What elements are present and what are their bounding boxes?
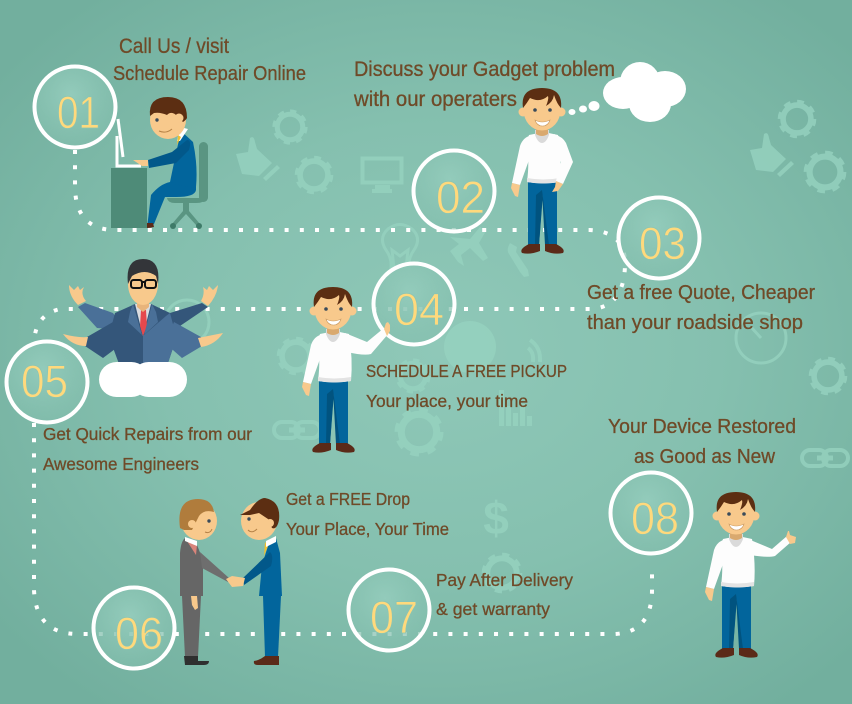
text: free drop: Get a FREE Drop — [286, 489, 410, 509]
cloud seat — [99, 362, 187, 397]
text: device restored: Your Device Restored — [608, 416, 796, 438]
step 04 — [302, 264, 567, 453]
icon: bar chart — [499, 390, 532, 426]
step 07 — [348, 570, 573, 650]
text: good as new: as Good as New — [634, 446, 776, 468]
number 06: 06 — [115, 608, 163, 659]
icon: gear — [296, 157, 332, 193]
step 02 — [353, 58, 686, 254]
icon: wrench — [508, 243, 529, 277]
icon: clock — [736, 313, 786, 363]
icon: chain — [274, 422, 320, 438]
icon: gear — [397, 360, 429, 392]
icon: gear — [278, 338, 314, 374]
man giving thumbs up — [705, 492, 796, 658]
number 03: 03 — [639, 218, 686, 269]
heading: call us: Call Us / visit — [119, 34, 229, 58]
icon: gear — [274, 111, 306, 143]
icon: signal — [528, 340, 540, 362]
number 04: 04 — [394, 284, 444, 335]
text: awesome engineers: Awesome Engineers — [43, 454, 199, 474]
computer — [117, 119, 141, 166]
icon: globe — [444, 321, 496, 373]
number circle 08 — [610, 472, 692, 554]
background icons — [165, 101, 848, 592]
text: pay after delivery: Pay After Delivery — [436, 570, 573, 590]
text: roadside shop: than your roadside shop — [587, 311, 803, 334]
heading: schedule repair online: Schedule Repair Online — [113, 63, 306, 85]
number circle 04 — [374, 264, 454, 344]
icon: light bulb — [382, 224, 418, 268]
icon: gear — [779, 101, 815, 137]
number 08: 08 — [631, 493, 679, 544]
step 08 — [608, 416, 796, 658]
number circle 02 — [414, 150, 494, 232]
text: quick repairs: Get Quick Repairs from our — [43, 424, 252, 444]
icon: gear — [397, 410, 441, 454]
number circle 03 — [618, 198, 700, 278]
text: discuss: Discuss your Gadget problem — [354, 58, 615, 81]
number circle 07 — [348, 570, 430, 650]
icon: airplane — [450, 227, 488, 266]
number 05: 05 — [21, 356, 68, 407]
number circle 01 — [34, 66, 116, 148]
number circle 06 — [94, 588, 174, 668]
icon: gear — [483, 554, 521, 592]
number 07: 07 — [370, 592, 418, 643]
icon: dollar: $ — [483, 492, 509, 544]
text: your place your time: Your Place, Your Time — [286, 519, 449, 539]
dotted path — [34, 150, 652, 634]
number circle 05 — [6, 342, 88, 422]
man pointing at circle — [302, 287, 390, 453]
text: operators: with our operaters — [353, 88, 517, 111]
chair — [167, 142, 208, 229]
icon: thumbs up — [236, 137, 280, 181]
meditating businessman — [63, 259, 223, 372]
icon: monitor — [362, 158, 402, 191]
seated man — [133, 97, 197, 228]
step 03 — [587, 198, 815, 334]
two men shaking hands — [179, 498, 282, 665]
text: your place: Your place, your time — [366, 391, 528, 411]
icon: clock behind figure — [165, 300, 209, 344]
text: schedule pickup: SCHEDULE A FREE PICKUP — [366, 361, 567, 381]
icon: gear — [805, 152, 845, 192]
step 05 — [6, 259, 252, 474]
icon: chain — [802, 450, 848, 466]
text: free quote: Get a free Quote, Cheaper — [587, 281, 815, 304]
step 06 — [94, 489, 449, 668]
number 02: 02 — [436, 172, 485, 223]
thought cloud — [568, 62, 686, 122]
number 01: 01 — [57, 87, 100, 138]
text: warranty: & get warranty — [436, 599, 550, 619]
icon: gear — [810, 358, 846, 394]
icon: thumbs up — [750, 133, 794, 177]
step 01 — [34, 34, 306, 229]
man with hand on hip — [511, 88, 573, 254]
desk — [111, 168, 147, 228]
